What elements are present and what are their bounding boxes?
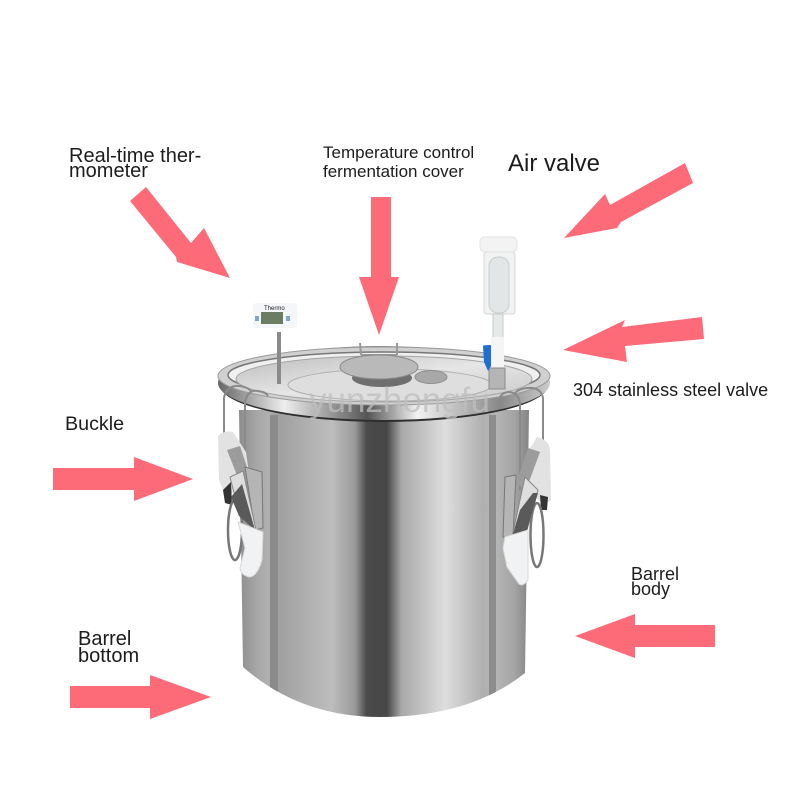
right wire bail — [500, 388, 543, 490]
label: buckle: Buckle — [65, 413, 124, 435]
thermometer head — [253, 303, 297, 328]
barrel body — [239, 410, 529, 717]
label: barrel body: Barrel — [631, 564, 679, 584]
lid groove — [228, 352, 540, 398]
arrow: to fermentation cover — [359, 197, 399, 335]
left buckle — [218, 432, 263, 577]
label: 304 stainless steel valve: 304 stainless steel valve — [573, 380, 768, 400]
lid front band — [218, 346, 550, 420]
label: barrel body: body — [631, 579, 670, 599]
barrel illustration — [218, 237, 551, 717]
lid surface — [236, 356, 532, 402]
fermentation port cap — [340, 355, 418, 379]
thermometer head: Thermo — [264, 306, 285, 312]
label: air valve: Air valve — [508, 150, 600, 177]
fermentation port handle — [360, 343, 397, 355]
small hatch — [415, 370, 447, 384]
watermark: yunzhongfu — [309, 381, 490, 420]
blue valve tap — [483, 345, 491, 371]
lid inner circle — [288, 369, 492, 401]
air valve airlock — [480, 237, 517, 389]
label: barrel bottom: Barrel — [78, 628, 131, 650]
lid outer ring — [218, 347, 550, 405]
label: barrel bottom: bottom — [78, 645, 139, 667]
arrow: to steel valve — [563, 317, 704, 362]
label: temperature control fermentation cover: fermentation cover — [323, 162, 464, 181]
label: temperature control fermentation cover: Temperature control — [323, 143, 474, 162]
thermometer probe — [277, 332, 281, 384]
body seam left — [270, 415, 278, 705]
body seam right — [489, 415, 496, 705]
right buckle — [503, 437, 551, 585]
arrow: to thermometer — [130, 187, 230, 278]
arrow: to air valve — [564, 163, 693, 238]
lid rim shadow — [220, 348, 548, 422]
arrow: to barrel body — [575, 614, 715, 658]
arrow: to barrel bottom — [70, 675, 211, 719]
label: real-time thermometer: Real-time ther- — [69, 145, 201, 167]
fermentation port base — [352, 369, 412, 387]
label: real-time thermometer: mometer — [69, 160, 148, 182]
left wire bail — [224, 386, 268, 490]
arrow: to buckle — [53, 457, 193, 501]
